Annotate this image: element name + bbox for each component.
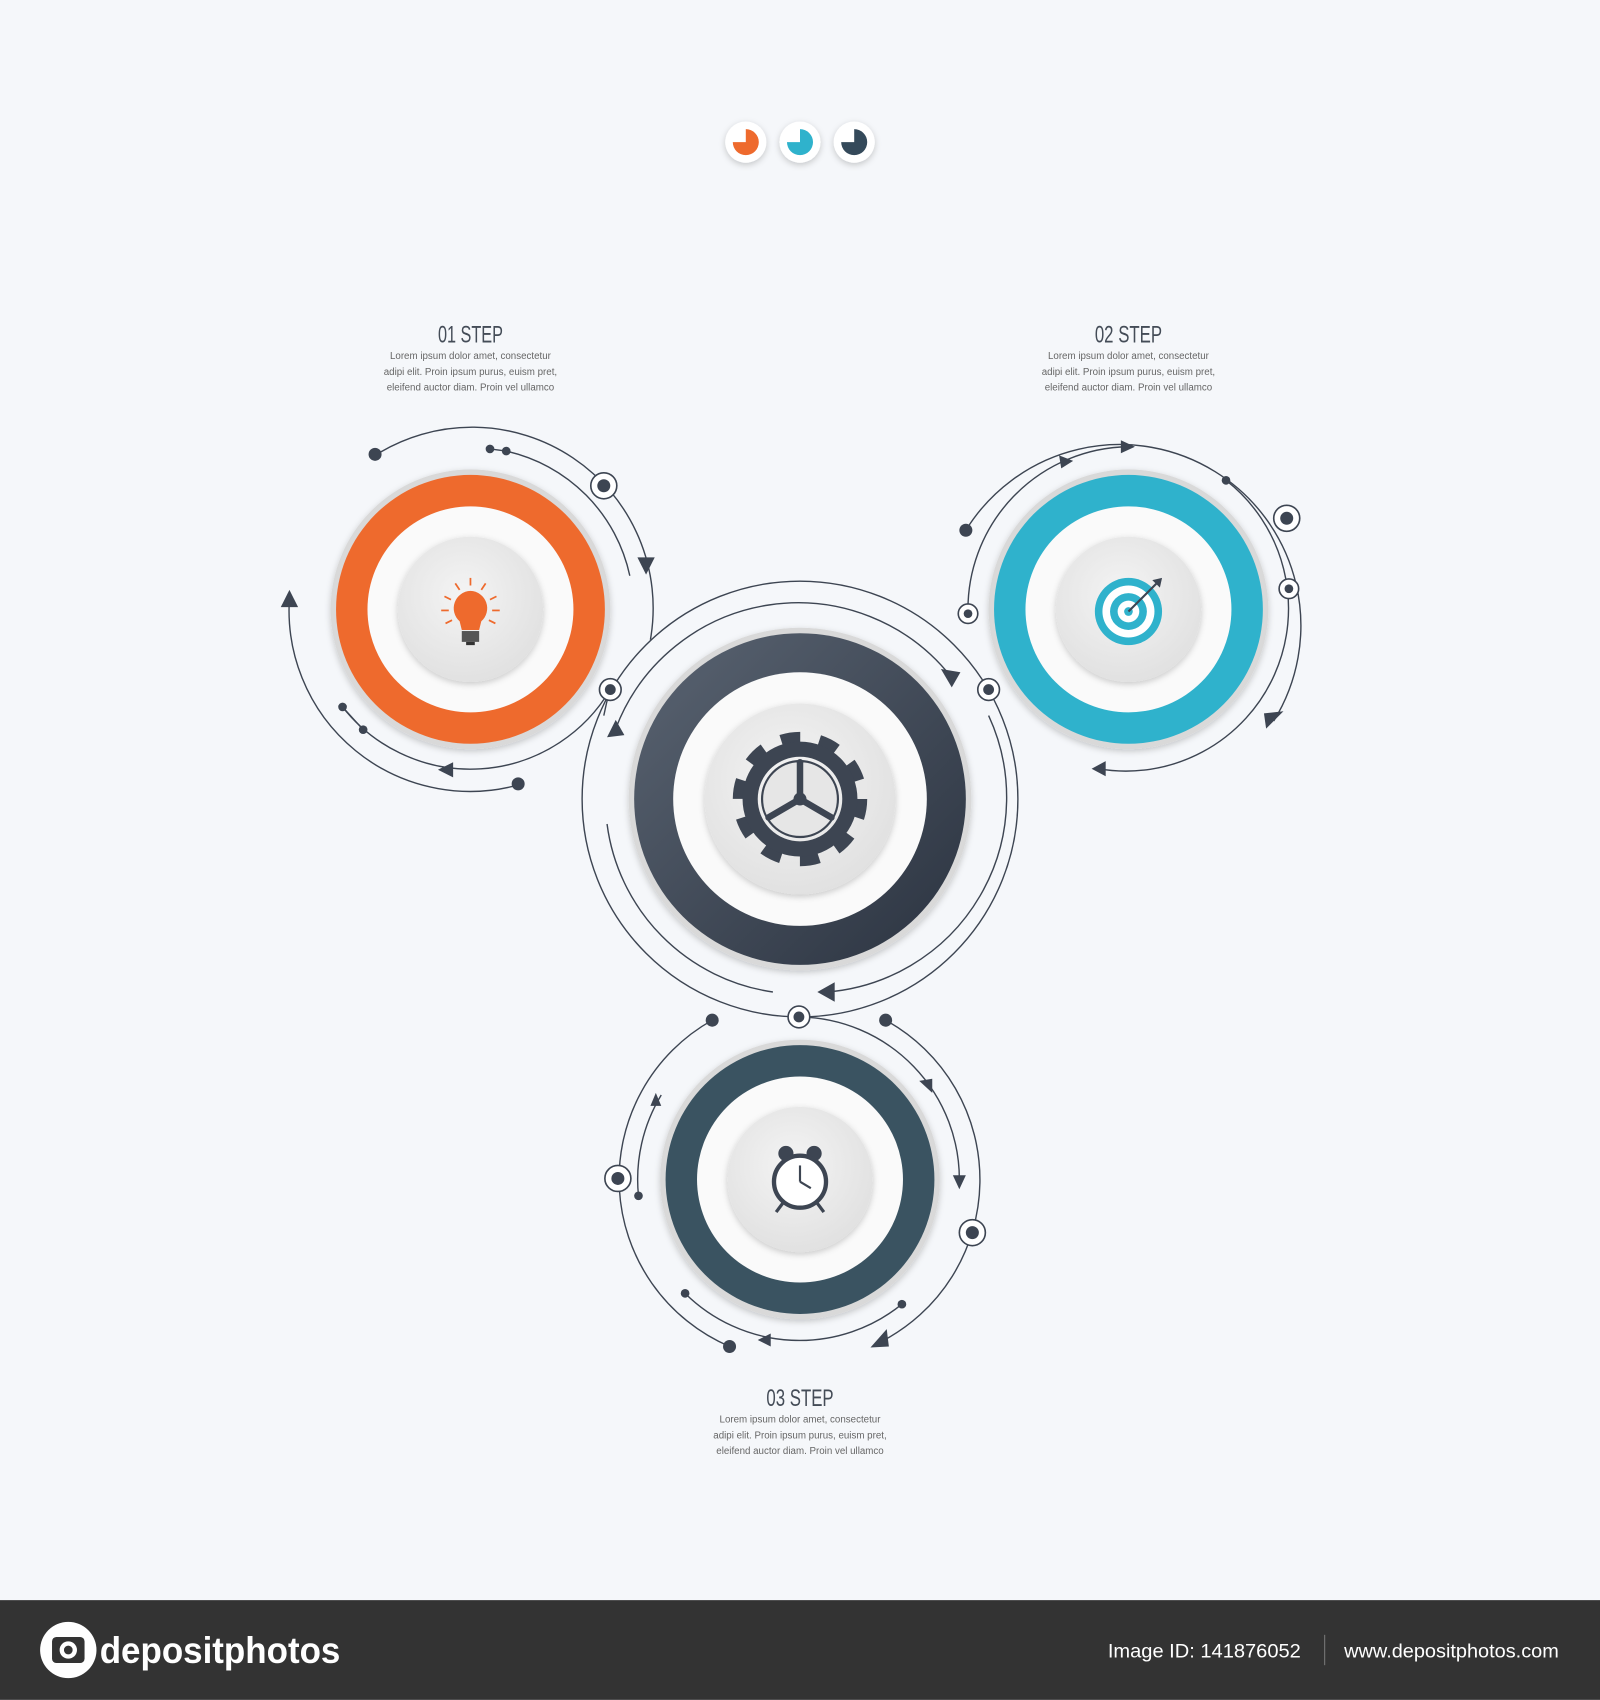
orbit lines: step 2 [966, 445, 1301, 771]
center circle [629, 628, 971, 970]
step 2 text: Lorem ipsum dolor amet, consectetur [1048, 351, 1210, 362]
footer image id: Image ID: 141876052 [1108, 1641, 1301, 1663]
step 3 text: Lorem ipsum dolor amet, consectetur [720, 1414, 881, 1425]
icon: target [1095, 578, 1162, 645]
footer url: www.depositphotos.com [1343, 1641, 1559, 1663]
step 3 text: 03 STEP [766, 1385, 834, 1412]
footer bar [0, 1600, 1600, 1700]
step 3 text [713, 1385, 887, 1457]
step 1 text: 01 STEP [438, 322, 503, 349]
step 1 text: Lorem ipsum dolor amet, consectetur [390, 351, 552, 362]
step 1 text: eleifend auctor diam. Proin vel ullamco [387, 382, 555, 393]
step 1 text: adipi elit. Proin ipsum purus, euism pret, [384, 367, 557, 378]
step 2 text [1042, 322, 1215, 393]
step 3 circle [660, 1040, 940, 1319]
step 2 circle [989, 470, 1268, 749]
orbit lines: step 1 [289, 427, 653, 791]
step 1 circle [331, 470, 610, 749]
step 2 text: 02 STEP [1095, 322, 1162, 349]
step 3 text: adipi elit. Proin ipsum purus, euism pret, [713, 1431, 887, 1442]
legend pie icons [725, 122, 875, 163]
orbit lines: center [582, 581, 1018, 1017]
icon: alarm clock [774, 1146, 826, 1212]
step 2 text: adipi elit. Proin ipsum purus, euism pret, [1042, 367, 1215, 378]
step 3 text: eleifend auctor diam. Proin vel ullamco [716, 1446, 884, 1457]
orbit lines: step 3 [619, 1017, 980, 1346]
step 2 text: eleifend auctor diam. Proin vel ullamco [1045, 382, 1213, 393]
icon: gear [739, 738, 861, 860]
footer logo [40, 1622, 340, 1678]
step 1 text [384, 322, 557, 393]
arrows [281, 440, 1283, 1348]
footer logo: depositphotos [100, 1630, 340, 1671]
nodes and dots [338, 445, 1300, 1353]
icon: lightbulb [441, 578, 500, 645]
